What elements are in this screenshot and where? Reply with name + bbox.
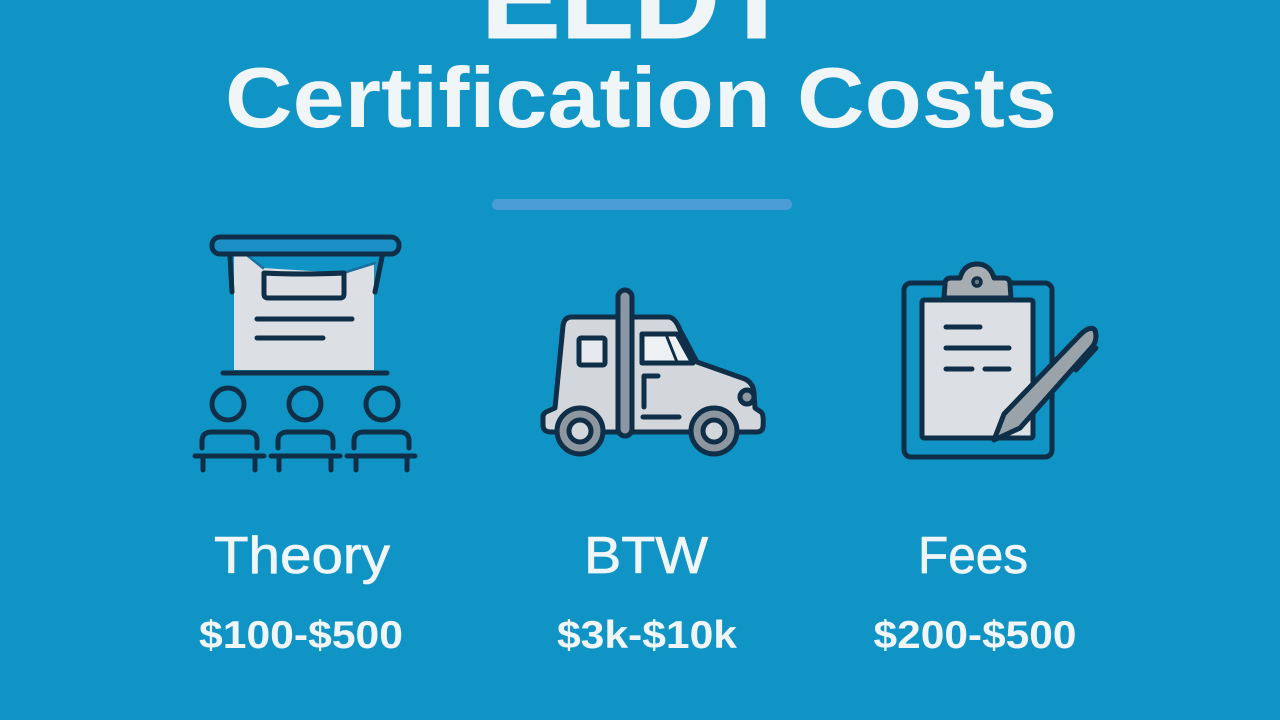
- price: Theory: $100-$500: [199, 614, 403, 657]
- icon: classroom: [195, 237, 415, 470]
- label: Theory: Theory: [214, 527, 390, 585]
- label: Fees: Fees: [918, 527, 1028, 585]
- icon: truck: [543, 290, 763, 454]
- label: BTW: BTW: [584, 527, 708, 585]
- divider bar: [492, 199, 792, 210]
- price: Fees: $200-$500: [874, 614, 1076, 657]
- icon: clipboard and pen: [904, 264, 1096, 457]
- price: BTW: $3k-$10k: [557, 614, 737, 657]
- title: Certification Costs: Certification Costs: [225, 51, 1057, 146]
